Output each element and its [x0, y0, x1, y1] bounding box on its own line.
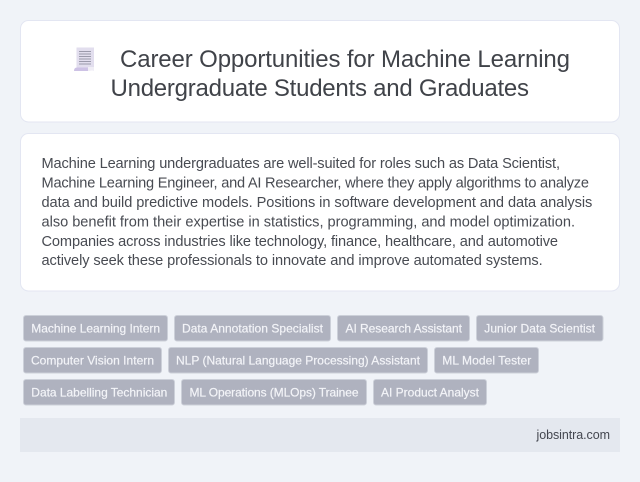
tag: Machine Learning Intern — [24, 316, 168, 341]
tag: AI Product Analyst — [374, 380, 486, 405]
description text: Machine Learning undergraduates are well-suited for roles such as Data Scientist, — [42, 156, 560, 172]
description panel — [20, 134, 620, 291]
tag: AI Research Assistant: AI Research Assistant — [346, 321, 463, 335]
tag: ML Model Tester: ML Model Tester — [442, 353, 531, 367]
icon: document scroll — [74, 48, 94, 71]
tag: ML Operations Trainee: ML Operations (MLOps) Trainee — [190, 385, 359, 399]
tag: Data Labelling Technician — [24, 380, 174, 405]
description text: Machine Learning Engineer, and AI Researcher, where they apply algorithms to analyze — [42, 175, 589, 191]
description text — [42, 156, 592, 269]
tag: NLP Assistant: NLP (Natural Language Processing) Assistant — [176, 353, 421, 367]
tag: AI Product Analyst: AI Product Analyst — [381, 385, 480, 399]
tag: Machine Learning Intern: Machine Learning Intern — [31, 321, 160, 335]
tag: Computer Vision Intern: Computer Vision Intern — [31, 353, 154, 367]
description text: data and build predictive models. Positions in software development and data analysis — [42, 195, 592, 211]
tag: Junior Data Scientist — [476, 316, 603, 341]
tags — [24, 316, 603, 405]
footer — [20, 418, 620, 452]
tag: Junior Data Scientist: Junior Data Scientist — [484, 321, 596, 335]
tag: Computer Vision Intern — [24, 348, 162, 373]
tag: Data Labelling Technician: Data Labelling Technician — [31, 385, 167, 399]
description text: actively seek these professionals to innovate and improve automated systems. — [42, 253, 543, 269]
header panel — [20, 20, 620, 122]
title — [110, 46, 570, 102]
description text: also benefit from their expertise in statistics, programming, and model optimization. — [42, 214, 575, 230]
title: Undergraduate Students and Graduates — [110, 75, 529, 102]
tag: AI Research Assistant — [338, 316, 470, 341]
title: Career Opportunities for Machine Learning — [120, 46, 570, 73]
tag: Data Annotation Specialist: Data Annotation Specialist — [182, 321, 324, 335]
tag: ML Operations Trainee — [182, 380, 366, 405]
tag: Data Annotation Specialist — [174, 316, 330, 341]
tag: NLP Assistant — [168, 348, 428, 373]
description text: Companies across industries like technology, finance, healthcare, and automotive — [42, 234, 558, 250]
footer source text: jobsintra.com — [536, 428, 610, 442]
tag: ML Model Tester — [434, 348, 538, 373]
